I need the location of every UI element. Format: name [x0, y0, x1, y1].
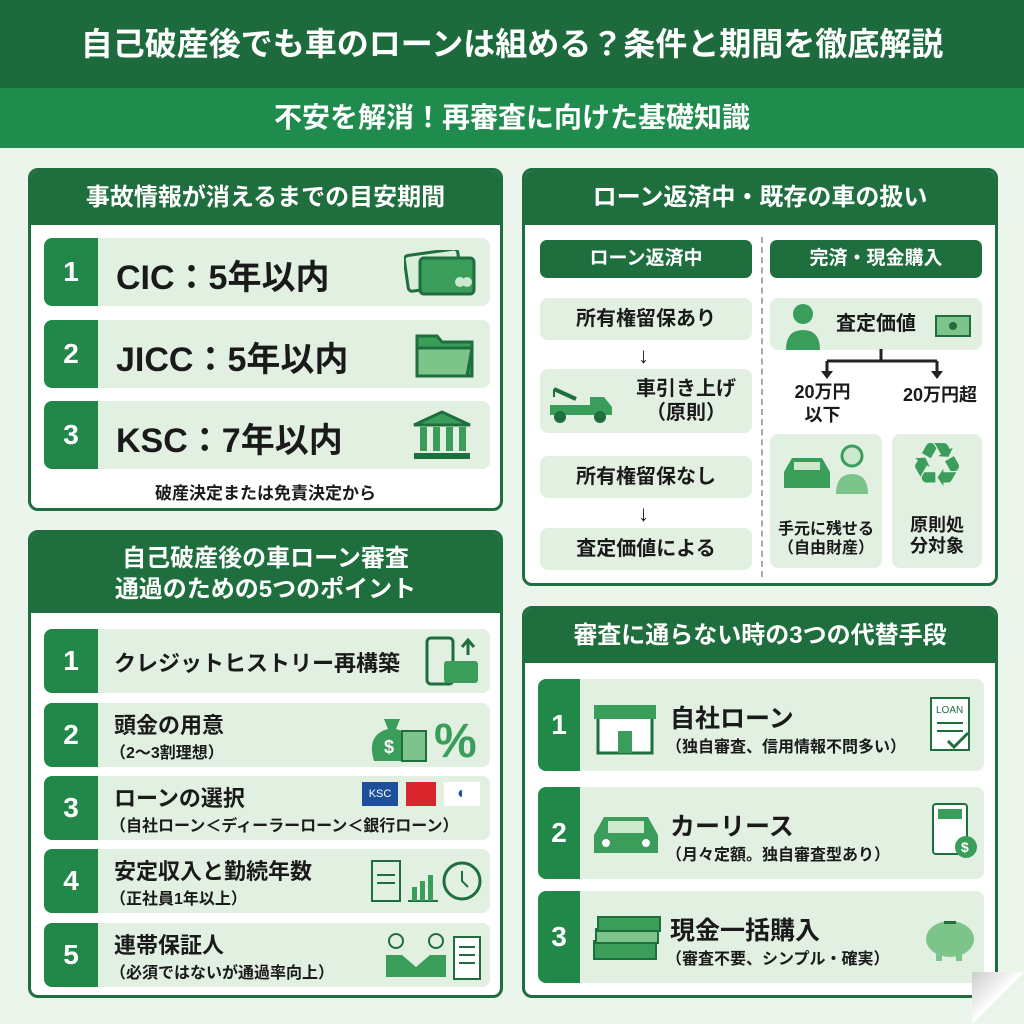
box: disposal: 分対象: [910, 536, 964, 556]
icon: tow truck: [550, 387, 612, 423]
icon: doc chart clock: [371, 860, 482, 902]
icon: phone card: [426, 636, 478, 686]
icon: loan doc: LOAN: [936, 705, 963, 716]
box: valuation: [540, 528, 752, 570]
point 3: （自社ローン＜ディーラーローン＜銀行ローン）: [110, 818, 458, 835]
heading: 通過のための5つのポイント: [115, 576, 416, 603]
heading: 自己破産後の車ローン審査: [122, 545, 409, 572]
heading: [31, 171, 500, 225]
arrow: ↓: [638, 501, 649, 526]
row 1 CIC: 1: [63, 256, 79, 287]
point 2: 頭金の用意: [114, 713, 224, 738]
point 4: （正社員1年以上）: [110, 891, 247, 908]
point 1: [44, 629, 490, 693]
box: keep: 手元に残せる: [778, 521, 874, 538]
icon: car and person: [784, 444, 868, 494]
label: under 200k: 以下: [804, 404, 840, 424]
heading: [525, 171, 995, 225]
label: under 200k: 20万円: [794, 382, 851, 402]
box: valuation: 査定価値による: [576, 538, 716, 560]
icon: cash: [935, 315, 971, 337]
point 2: （2〜3割理想）: [110, 745, 224, 762]
arrow: ↓: [638, 343, 649, 368]
panel: credit info periods: [28, 168, 503, 511]
footnote: 破産決定または免責決定から: [155, 484, 376, 503]
label: over 200k: 20万円超: [903, 385, 977, 405]
heading: 事故情報が消えるまでの目安期間: [86, 184, 445, 211]
icon: piggy bank: [926, 921, 974, 961]
icon: money bag percent: [372, 715, 477, 763]
point 1: 1: [63, 645, 79, 676]
icon: bank: [413, 410, 471, 459]
alt 1: [538, 679, 984, 771]
icon: logos: KSC: [369, 788, 391, 800]
icon: recycle: ♻: [914, 439, 960, 491]
point 4: 安定収入と勤続年数: [114, 859, 312, 884]
alt 2: [538, 787, 984, 879]
title banner: [0, 0, 1024, 88]
box: appraisal value: 査定価値: [836, 313, 916, 335]
sub heading: paid / cash: [770, 240, 982, 278]
icon: cash stack: [593, 916, 661, 960]
row 1 CIC: CIC：5年以内: [116, 259, 329, 297]
point 5: 5: [63, 939, 79, 970]
box: retention yes: [540, 298, 752, 340]
row 2 JICC: 2: [63, 338, 79, 369]
box: keep: （自由財産）: [778, 540, 874, 557]
alt 1: 1: [551, 709, 567, 740]
icon: logos: ◐: [457, 785, 467, 802]
subtitle banner: 不安を解消！再審査に向けた基礎知識: [274, 102, 750, 133]
icon: card: [404, 250, 476, 296]
sub heading: in repayment: ローン返済中: [589, 248, 703, 269]
icon: shop: [594, 705, 656, 754]
box: appraisal value: [770, 298, 982, 350]
box: keep: [770, 434, 882, 568]
heading: [525, 609, 995, 663]
alt 2: 2: [551, 817, 567, 848]
icon: money bag percent: $: [384, 737, 394, 757]
alt 2: （月々定額。独自審査型あり）: [666, 847, 890, 864]
heading: [31, 533, 500, 613]
point 4: [44, 849, 490, 913]
title banner: 自己破産後でも車のローンは組める？条件と期間を徹底解説: [81, 26, 943, 62]
box: disposal: [892, 434, 982, 568]
branch arrows: [821, 349, 943, 379]
page curl: [972, 972, 1024, 1024]
row 1 CIC: [44, 238, 490, 306]
box: repossession: 車引き上げ: [636, 378, 736, 400]
alt 3: [538, 891, 984, 983]
alt 3: （審査不要、シンプル・確実）: [666, 951, 890, 968]
box: disposal: 原則処: [910, 515, 964, 535]
box: retention none: 所有権留保なし: [576, 466, 716, 488]
alt 2: カーリース: [670, 813, 794, 841]
box: retention yes: 所有権留保あり: [576, 308, 716, 330]
point 1: クレジットヒストリー再構築: [114, 651, 400, 676]
subtitle banner: [0, 88, 1024, 148]
point 2: [44, 703, 490, 767]
label: under 200k: [794, 382, 851, 424]
sub heading: in repayment: [540, 240, 752, 278]
box: repossession: （原則）: [646, 402, 726, 424]
point 2: 2: [63, 719, 79, 750]
point 5: [44, 923, 490, 987]
point 5: （必須ではないが通過率向上）: [110, 965, 334, 982]
point 3: 3: [63, 792, 79, 823]
icon: logos: [362, 782, 480, 806]
panel: car handling during loan: [522, 168, 998, 586]
row 2 JICC: [44, 320, 490, 388]
icon: folder: [416, 334, 474, 378]
icon: handshake doc: [386, 933, 481, 980]
box: repossession: [540, 369, 752, 433]
row 3 KSC: 3: [63, 419, 79, 450]
icon: car: [594, 817, 658, 853]
alt 3: 3: [551, 921, 567, 952]
sub heading: paid / cash: 完済・現金購入: [809, 248, 942, 269]
icon: calculator: [932, 803, 977, 858]
heading: 審査に通らない時の3つの代替手段: [573, 622, 947, 649]
icon: loan doc: [930, 697, 970, 751]
panel: 5 points: [28, 530, 503, 998]
row 2 JICC: JICC：5年以内: [116, 341, 348, 379]
row 3 KSC: KSC：7年以内: [116, 422, 343, 460]
alt 3: 現金一括購入: [670, 917, 820, 945]
icon: calculator: $: [961, 839, 969, 855]
point 3: [44, 776, 490, 840]
panel: 3 alternatives: [522, 606, 998, 998]
point 3: ローンの選択: [114, 786, 245, 811]
icon: person: [786, 304, 820, 350]
point 4: 4: [63, 865, 79, 896]
heading: ローン返済中・既存の車の扱い: [593, 184, 927, 211]
point 5: 連帯保証人: [114, 933, 224, 958]
alt 1: 自社ローン: [670, 705, 794, 733]
alt 1: （独自審査、信用情報不問多い）: [666, 739, 906, 756]
box: retention none: [540, 456, 752, 498]
row 3 KSC: [44, 401, 490, 469]
